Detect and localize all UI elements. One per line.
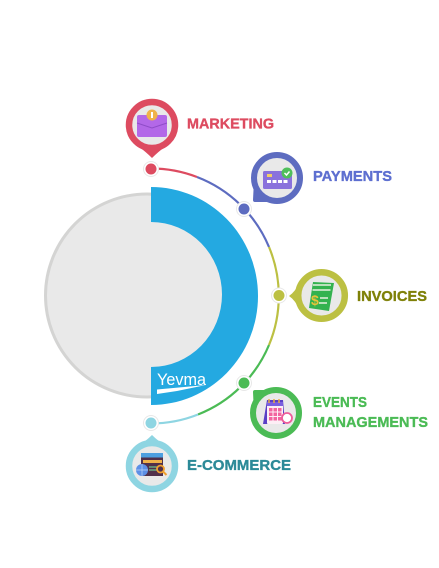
pin: payments [253,155,300,202]
icon: credit card [263,168,292,189]
pin: marketing [129,102,175,158]
pin: invoices [289,272,345,319]
pin: events [253,390,299,436]
label: marketing: MARKETING [187,116,274,132]
label: payments: PAYMENTS [313,168,392,185]
timeline arc [151,168,279,424]
icon: invoice: $ [311,292,319,308]
node: e-commerce [144,416,158,430]
central gray circle [46,194,248,397]
node: payments [236,202,252,216]
icon: calendar [263,399,292,424]
label: managements: MANAGEMENTS [313,414,428,431]
node: events [236,376,252,390]
icon: web browser [136,453,166,476]
node: invoices [272,288,286,303]
label: invoices: INVOICES [357,288,427,305]
label: e-commerce: E-COMMERCE [187,457,291,474]
logo: Yevma: Yevma [157,370,207,389]
node: marketing [144,162,158,176]
pin: e-commerce [129,435,175,489]
icon: envelope [137,110,167,137]
blue half ring [151,187,258,405]
label: events: EVENTS [313,394,367,411]
